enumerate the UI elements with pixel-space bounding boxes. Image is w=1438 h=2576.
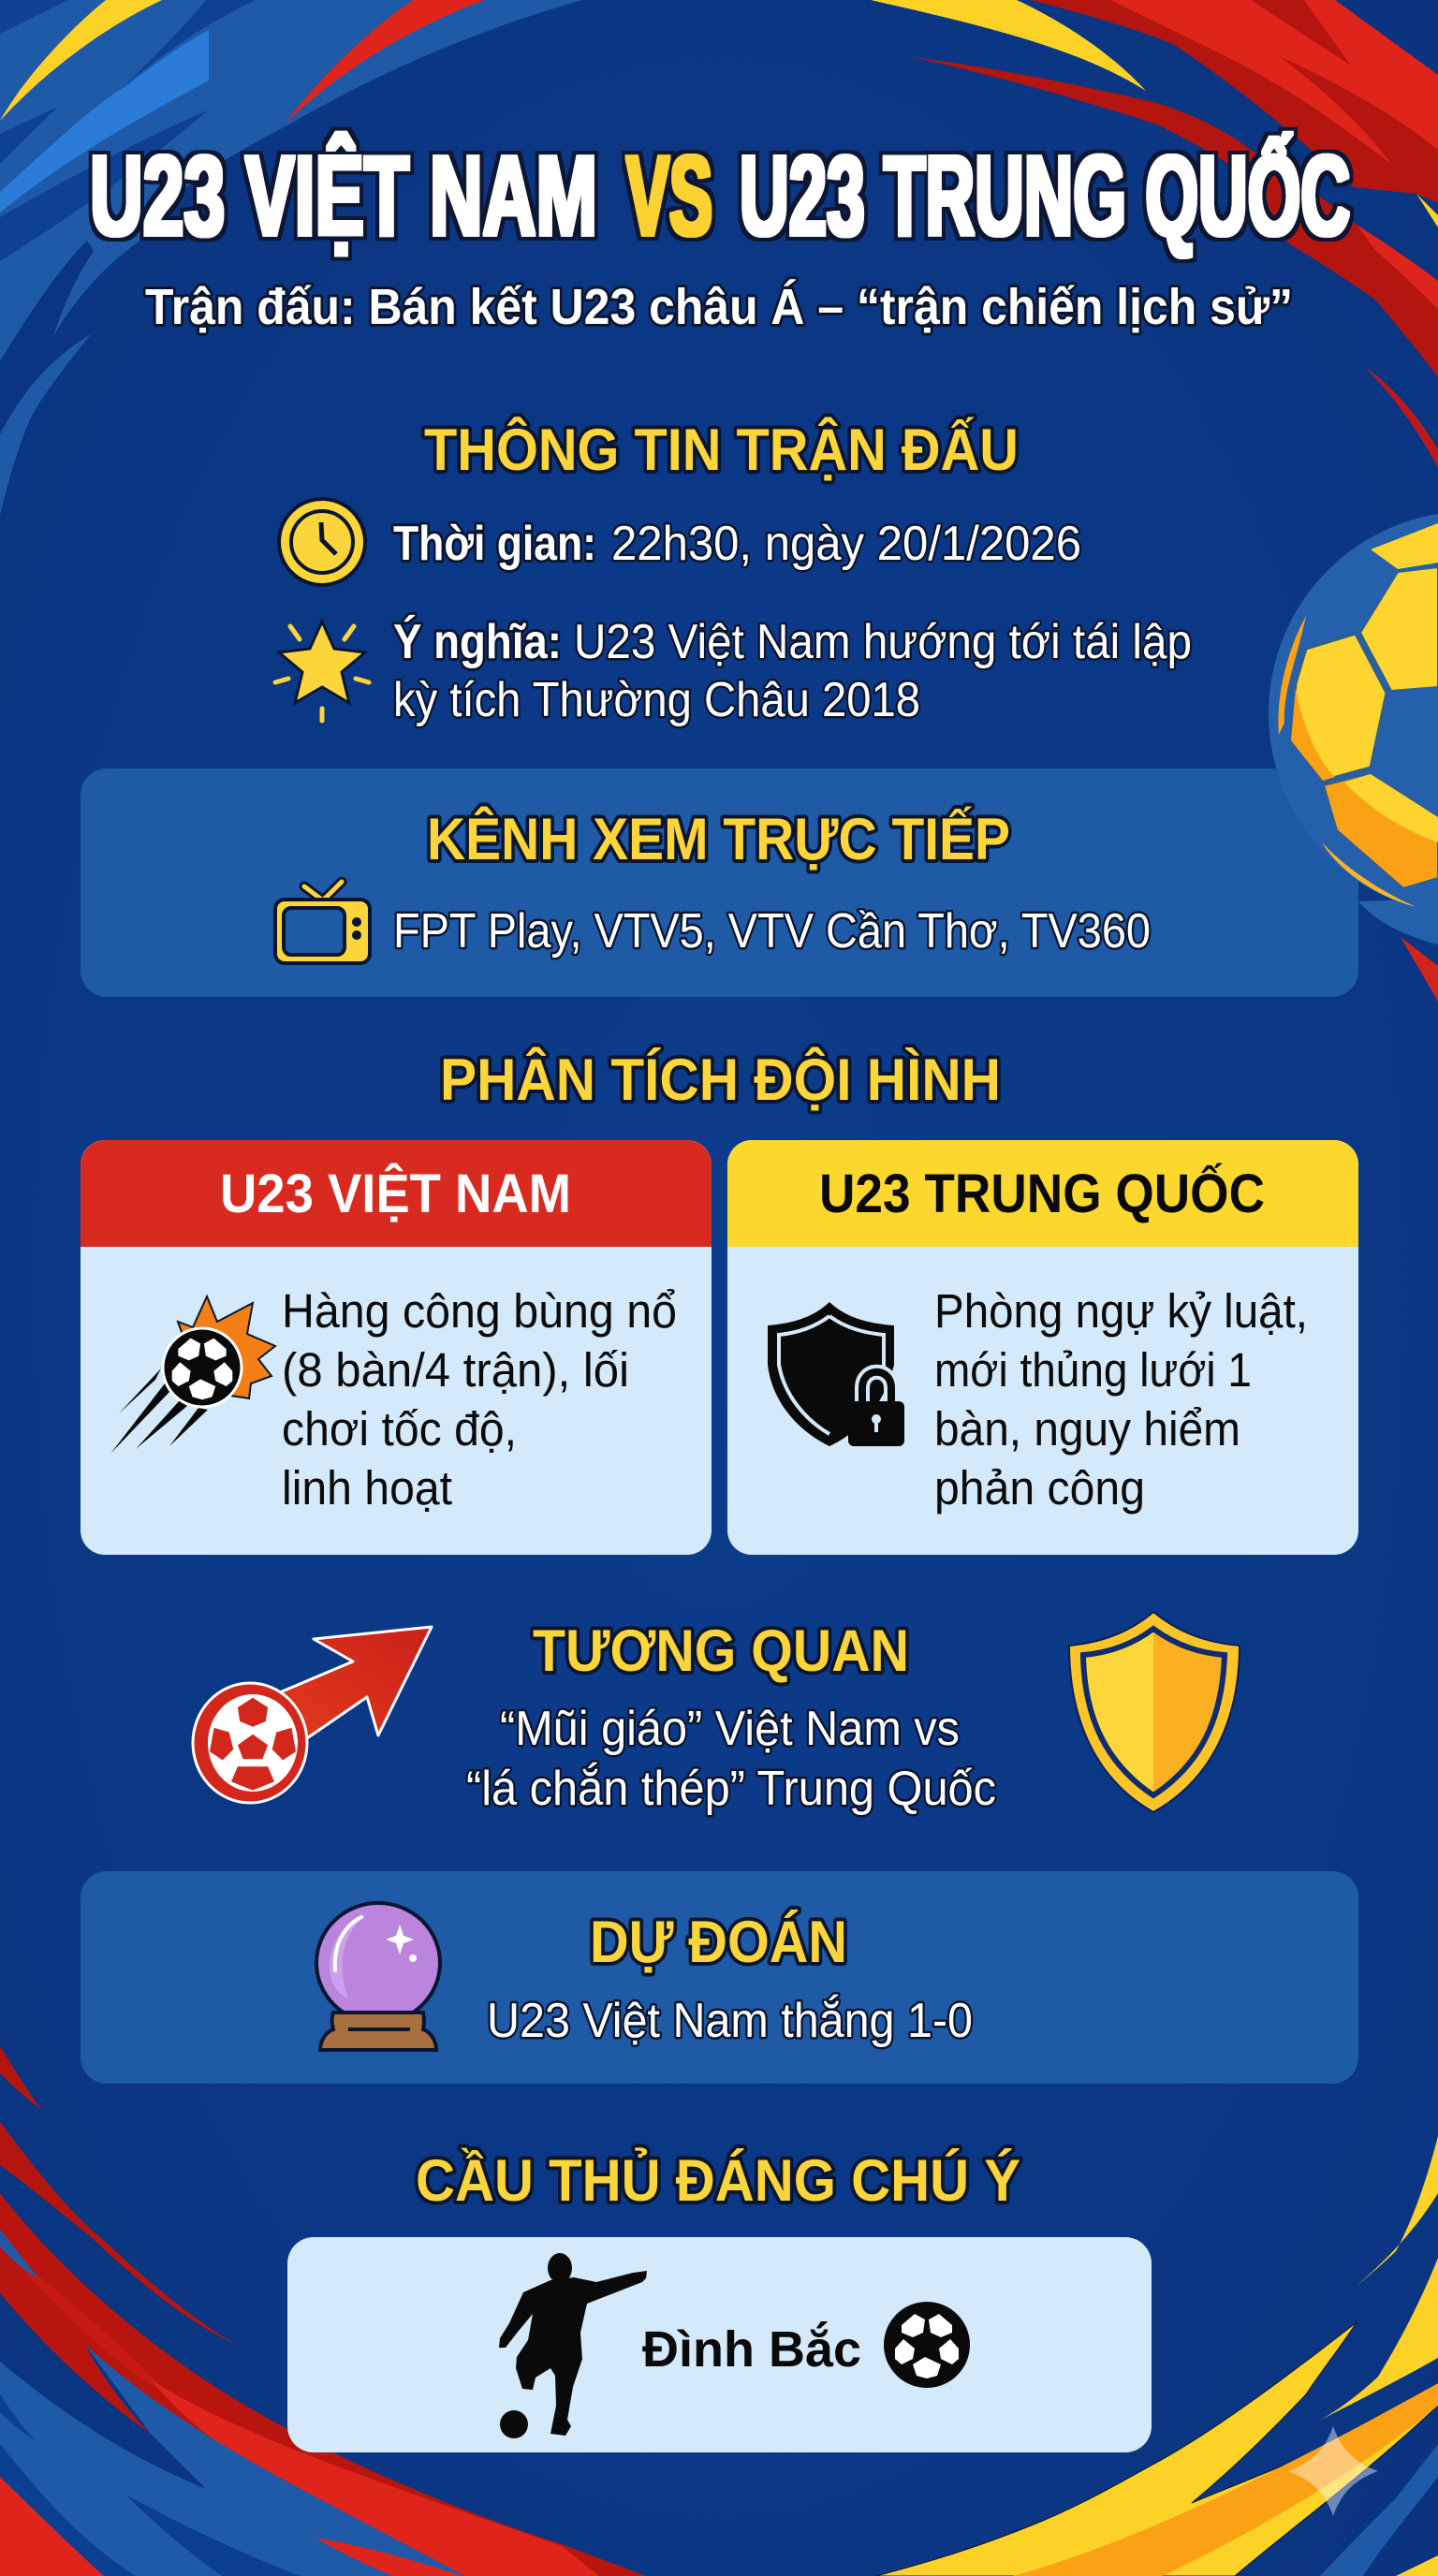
channel list: FPT Play, VTV5, VTV Cần Thơ, TV360 (393, 904, 1151, 959)
team description: bàn, nguy hiểm (934, 1402, 1240, 1456)
panel: U23 Vietnam (81, 1140, 712, 1555)
heading: head to head: TƯƠNG QUAN (533, 1618, 909, 1684)
soccer ball decoration at right edge (1269, 511, 1438, 944)
team description: chơi tốc độ, (282, 1402, 517, 1456)
team name: U23 TRUNG QUỐC (819, 1164, 1265, 1224)
meaning text: kỳ tích Thường Châu 2018 (393, 673, 920, 727)
icon: shield with padlock (768, 1302, 904, 1446)
team description: Hàng công bùng nổ (282, 1284, 677, 1338)
match time text: Thời gian: (393, 517, 596, 571)
icon: television (275, 882, 370, 963)
heading: live channels: KÊNH XEM TRỰC TIẾP (427, 806, 1010, 872)
sparkle watermark (1288, 2426, 1378, 2516)
player name: Đình Bắc (642, 2321, 861, 2378)
head to head text: “lá chắn thép” Trung Quốc (466, 1762, 996, 1816)
icon: star (275, 622, 369, 721)
panel: prediction (81, 1871, 1358, 2084)
match time text (393, 517, 1081, 571)
team description (282, 1284, 677, 1515)
head to head text (466, 1702, 996, 1816)
team description: mới thủng lưới 1 (934, 1343, 1252, 1397)
team description (934, 1284, 1308, 1515)
icon: soccer ball (884, 2302, 970, 2388)
meaning text: Ý nghĩa: (393, 614, 562, 669)
subtitle: Trận đấu: Bán kết U23 châu Á – “trận chiến lịch sử” (145, 279, 1293, 335)
team description: phản công (934, 1461, 1145, 1515)
heading: prediction: DỰ ĐOÁN (590, 1910, 847, 1975)
icon: exploding ball (110, 1296, 275, 1454)
heading: notable player: CẦU THỦ ĐÁNG CHÚ Ý (416, 2147, 1020, 2214)
icon: clock (279, 499, 365, 585)
title (90, 132, 1350, 259)
heading: squad analysis: PHÂN TÍCH ĐỘI HÌNH (440, 1046, 1001, 1113)
heading: match information: THÔNG TIN TRẬN ĐẤU (424, 417, 1019, 483)
meaning text: U23 Việt Nam hướng tới tái lập (574, 615, 1192, 669)
panel: U23 China (727, 1140, 1358, 1555)
prediction result: U23 Việt Nam thắng 1-0 (487, 1994, 973, 2048)
icon: yellow shield (1069, 1612, 1240, 1812)
team description: linh hoạt (282, 1461, 452, 1515)
icon: ball with arrow (193, 1627, 432, 1803)
team description: (8 bàn/4 trận), lối (282, 1343, 629, 1397)
panel: notable player (287, 2237, 1152, 2452)
icon: crystal ball (316, 1903, 440, 2050)
panel: live channels (81, 768, 1358, 997)
team description: Phòng ngự kỷ luật, (934, 1284, 1308, 1338)
title: U23 VIỆT NAM (90, 132, 597, 259)
team name: U23 VIỆT NAM (220, 1164, 571, 1224)
title: VS (626, 132, 712, 259)
match time text: 22h30, ngày 20/1/2026 (611, 517, 1081, 571)
head to head text: “Mũi giáo” Việt Nam vs (500, 1702, 960, 1756)
meaning text (393, 614, 1192, 727)
icon: player silhouette (499, 2253, 647, 2438)
